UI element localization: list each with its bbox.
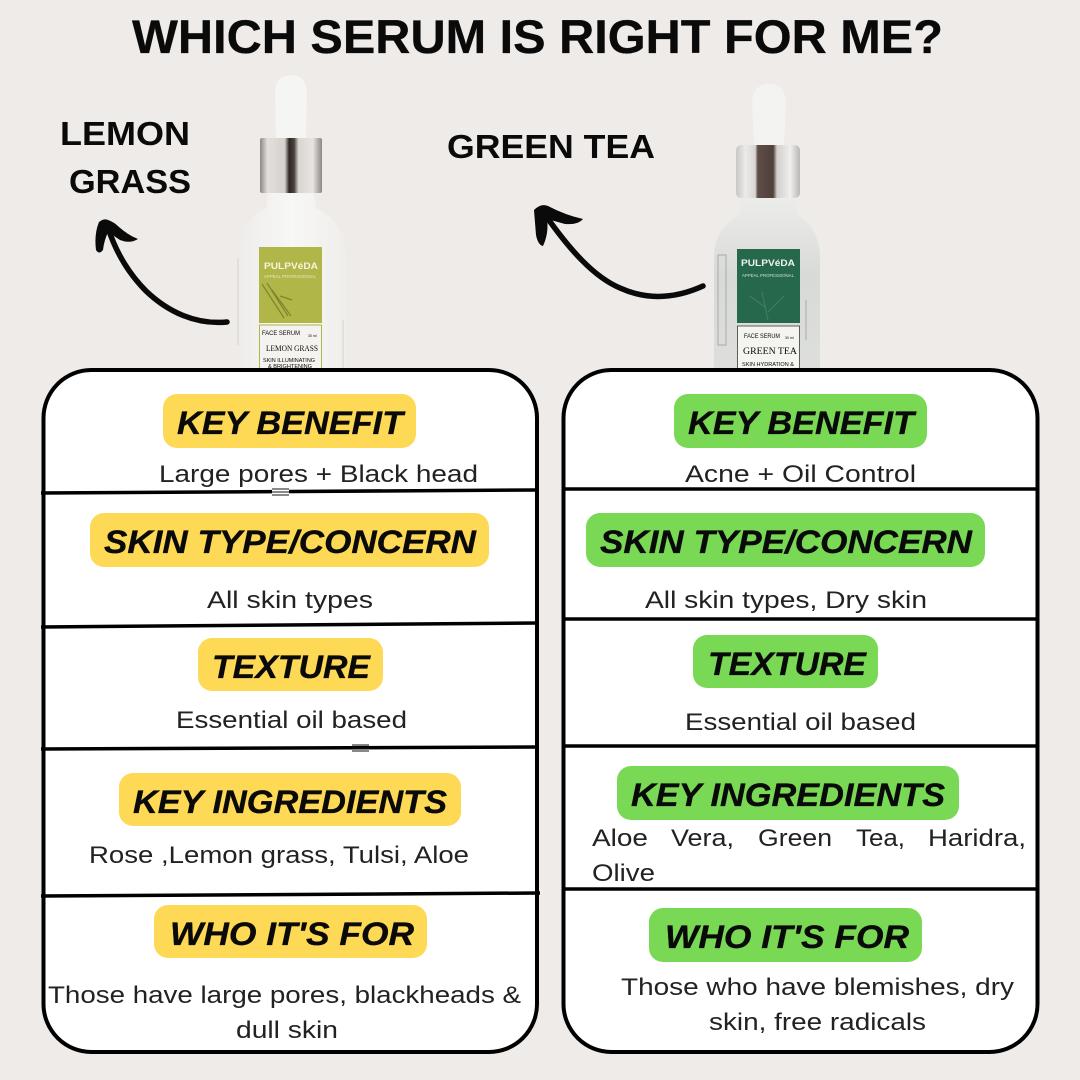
info text <box>262 330 318 370</box>
divider marks <box>272 488 369 751</box>
row: key ingredients: Haridra, <box>928 825 1026 852</box>
row: key ingredients: Rose ,Lemon grass, Tulsi, Aloe <box>89 842 469 869</box>
side print <box>718 255 806 345</box>
panel: green tea <box>563 370 1038 1052</box>
brand subtitle: APPEAL PROFESSIONAL <box>264 274 316 279</box>
info text <box>742 333 798 368</box>
row: texture <box>176 638 407 734</box>
row: key ingredients: KEY INGREDIENTS <box>631 777 946 813</box>
glass body <box>237 193 346 372</box>
row: who it's for: Those have large pores, blackheads & <box>48 982 521 1009</box>
brand name: PULPVéDA <box>264 261 318 272</box>
panel frame <box>564 370 1038 1052</box>
row: texture: TEXTURE <box>212 649 372 685</box>
label: green tea: GREEN TEA <box>447 128 655 165</box>
bottle: lemon grass <box>237 75 346 372</box>
label: lemon grass: LEMON <box>60 115 190 152</box>
row: key ingredients: Tea, <box>856 825 905 852</box>
info text: 30 ml <box>308 334 317 338</box>
info text: SKIN ILLUMINATING <box>263 358 315 364</box>
tea leaf drawing <box>750 292 784 320</box>
row: texture: Essential oil based <box>176 707 407 734</box>
row: who it's for: dull skin <box>236 1017 338 1044</box>
info text: SKIN HYDRATION & <box>742 362 794 368</box>
row: key ingredients <box>89 773 469 869</box>
product label <box>259 247 322 323</box>
info text: 30 ml <box>785 336 794 340</box>
row: key benefit: KEY BENEFIT <box>688 405 917 441</box>
white info box <box>260 325 322 372</box>
info text: FACE SERUM <box>262 330 300 337</box>
row: who it's for: Those who have blemishes, dry <box>621 974 1015 1001</box>
info text: & BRIGHTENING <box>268 364 312 370</box>
dropper bulb <box>752 84 786 146</box>
brand name: PULPVéDA <box>741 258 795 269</box>
title: WHICH SERUM IS RIGHT FOR ME? <box>132 10 943 63</box>
row: skin type <box>586 513 985 614</box>
info text: LEMON GRASS <box>266 344 318 353</box>
label: lemon grass: GRASS <box>69 163 191 200</box>
row: key benefit <box>674 394 927 488</box>
info text: FACE SERUM <box>744 333 780 340</box>
dropper bulb <box>275 75 307 139</box>
row: texture <box>685 635 916 736</box>
row: who it's for <box>48 905 521 1044</box>
row: key benefit <box>159 394 478 488</box>
row: key benefit: Acne + Oil Control <box>685 461 916 488</box>
row: who it's for: WHO IT'S FOR <box>170 916 414 952</box>
row: key ingredients: KEY INGREDIENTS <box>133 784 448 820</box>
row: who it's for: WHO IT'S FOR <box>665 919 909 955</box>
brand subtitle: APPEAL PROFESSIONAL <box>742 273 794 278</box>
arrow: to green tea <box>534 205 703 296</box>
row: texture: Essential oil based <box>685 709 916 736</box>
row: who it's for: skin, free radicals <box>709 1009 926 1036</box>
side print <box>238 258 343 370</box>
info text: GREEN TEA <box>743 346 798 356</box>
product label <box>737 249 800 323</box>
row: key ingredients: Green <box>758 825 832 852</box>
panel frame <box>44 370 537 1052</box>
row: skin type: SKIN TYPE/CONCERN <box>104 524 477 560</box>
white info box <box>738 326 800 372</box>
bottle: green tea <box>714 84 820 372</box>
row: key benefit: KEY BENEFIT <box>177 405 406 441</box>
glass body <box>714 197 820 372</box>
silver collar <box>736 145 800 198</box>
label: lemon grass <box>60 115 191 200</box>
row: texture: TEXTURE <box>708 646 868 682</box>
silver collar <box>260 138 322 193</box>
arrow: to lemon grass <box>95 219 227 322</box>
row: skin type <box>90 513 489 614</box>
row: skin type: All skin types <box>207 587 373 614</box>
row: key ingredients <box>592 766 1026 887</box>
row: key benefit: Large pores + Black head <box>159 461 478 488</box>
row: who it's for <box>621 908 1015 1036</box>
lemongrass drawing <box>262 283 292 318</box>
row: key ingredients: Vera, <box>671 825 734 852</box>
row: key ingredients: Aloe <box>592 825 648 852</box>
row: skin type: SKIN TYPE/CONCERN <box>600 524 973 560</box>
panel: lemon grass <box>41 370 540 1052</box>
row: key ingredients: Olive <box>592 860 655 887</box>
row: skin type: All skin types, Dry skin <box>645 587 927 614</box>
